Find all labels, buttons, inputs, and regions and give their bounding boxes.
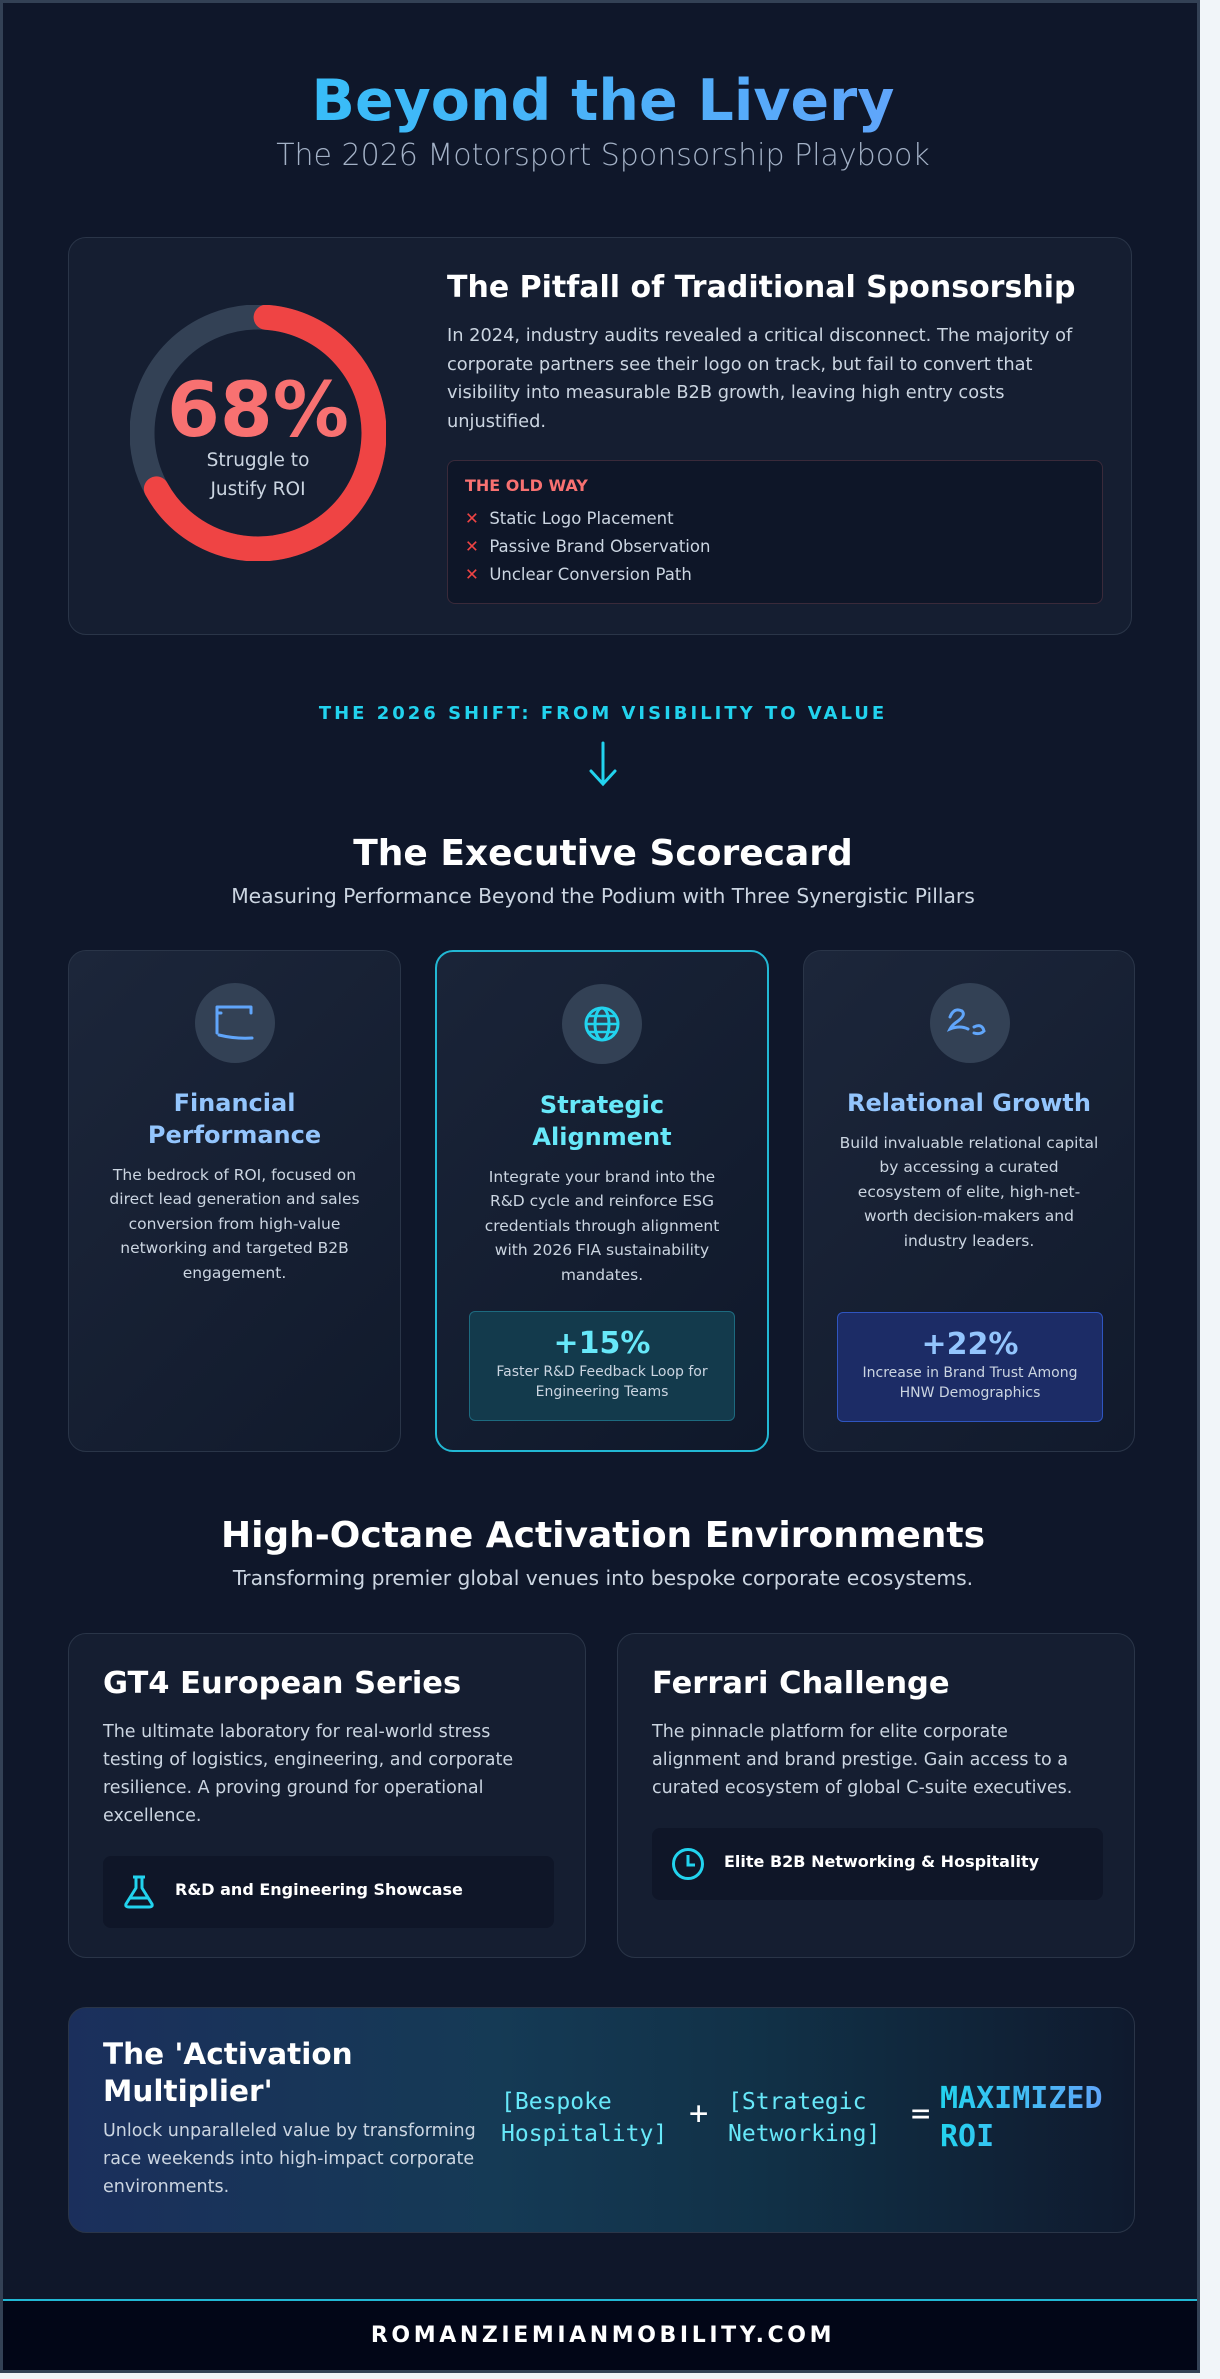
card title	[148, 1089, 321, 1149]
old way box: ✕ Passive Brand Observation	[465, 537, 710, 556]
stat: +15%: Faster R&D Feedback Loop for	[496, 1364, 708, 1380]
shift label: THE 2026 SHIFT: FROM VISIBILITY TO VALUE	[319, 703, 887, 724]
formula	[501, 2081, 1103, 2154]
old way box: THE OLD WAY	[465, 476, 588, 495]
heading: activation environments: High-Octane Activation Environments	[221, 1515, 985, 1556]
heading: The Pitfall of Traditional Sponsorship	[447, 270, 1075, 305]
formula: =	[911, 2094, 930, 2132]
formula: [Bespoke	[501, 2089, 612, 2115]
card body: The bedrock of ROI, focused on direct lead generation and sales conversion from high-value networking and targeted B2B engagement.	[109, 1166, 360, 1282]
footer: ROMANZIEMIANMOBILITY.COM	[371, 2323, 835, 2348]
formula: Hospitality]	[501, 2121, 667, 2147]
paragraph: In 2024, industry audits revealed a critical disconnect. The majority of corporate partners see their logo on track, but fail to convert that visibility into measurable B2B growth, leaving high entry costs unjustified.	[447, 325, 1072, 432]
subheading: Transforming premier global venues into bespoke corporate ecosystems.	[233, 1566, 973, 1590]
card title	[532, 1091, 672, 1151]
formula: Networking]	[728, 2121, 880, 2147]
formula: [Strategic	[728, 2089, 866, 2115]
feature: R&D	[103, 1856, 554, 1928]
donut chart: 68%	[130, 305, 386, 561]
card: strategic alignment	[435, 950, 769, 1452]
icon: chart	[195, 983, 275, 1063]
feature: networking	[652, 1828, 1103, 1900]
venue title: GT4 European Series	[103, 1666, 461, 1701]
icon: globe	[562, 984, 642, 1064]
venue body: The pinnacle platform for elite corporate alignment and brand prestige. Gain access to a curated ecosystem of global C-suite executives.	[652, 1722, 1072, 1798]
panel: activation multiplier	[68, 2007, 1135, 2233]
icon: handshake	[930, 983, 1010, 1063]
multiplier body: Unlock unparalleled value by transforming race weekends into high-impact corporate environments.	[103, 2121, 476, 2197]
card title: Strategic	[540, 1091, 664, 1119]
stat: +22%: +22%	[922, 1327, 1018, 1362]
venue body: The ultimate laboratory for real-world stress testing of logistics, engineering, and corporate resilience. A proving ground for operational excellence.	[103, 1722, 513, 1826]
old way box: ✕ Static Logo Placement	[465, 509, 674, 528]
multiplier title: Multiplier'	[103, 2074, 273, 2108]
footer	[3, 2299, 1203, 2379]
card title: Relational Growth	[847, 1089, 1091, 1117]
title: Beyond the Livery	[312, 68, 894, 134]
card title: Financial	[174, 1089, 295, 1117]
stat: +22%: Increase in Brand Trust Among	[863, 1365, 1077, 1381]
multiplier title: The 'Activation	[103, 2037, 353, 2071]
donut chart: 68%: 68%	[167, 365, 349, 454]
stat: +22%: HNW Demographics	[900, 1385, 1040, 1401]
icon: clock	[672, 1848, 704, 1880]
old way box	[447, 460, 1103, 604]
multiplier title	[103, 2037, 353, 2108]
panel: Ferrari Challenge	[617, 1633, 1135, 1958]
stat: +15%: +15%	[554, 1326, 650, 1361]
card body: Build invaluable relational capital by accessing a curated ecosystem of elite, high-net-worth decision-makers and industry leaders.	[840, 1134, 1098, 1250]
formula: +	[689, 2094, 708, 2132]
venue title: Ferrari Challenge	[652, 1666, 950, 1701]
card title: Alignment	[532, 1123, 672, 1151]
donut chart: 68%: Struggle to	[207, 450, 309, 471]
donut chart: 68%: Justify ROI	[210, 479, 306, 500]
feature: networking: Elite B2B Networking & Hospitality	[724, 1852, 1039, 1871]
stat: +22%	[837, 1312, 1103, 1422]
stat: +15%: Engineering Teams	[536, 1384, 668, 1400]
card: financial performance	[68, 950, 401, 1452]
subtitle: The 2026 Motorsport Sponsorship Playbook	[276, 138, 930, 173]
card title: Performance	[148, 1121, 321, 1149]
feature: R&D: R&D and Engineering Showcase	[175, 1880, 463, 1899]
arrow	[589, 742, 617, 786]
panel: pitfall	[68, 237, 1132, 635]
panel: GT4 European Series	[68, 1633, 586, 1958]
subheading: Measuring Performance Beyond the Podium with Three Synergistic Pillars	[231, 884, 975, 908]
old way box: ✕ Unclear Conversion Path	[465, 565, 692, 584]
stat: +15%	[469, 1311, 735, 1421]
formula: ROI	[940, 2119, 994, 2154]
formula: MAXIMIZED	[940, 2081, 1103, 2116]
card: relational growth	[803, 950, 1135, 1452]
icon: flask	[124, 1876, 154, 1908]
card body: Integrate your brand into the R&D cycle and reinforce ESG credentials through alignment with 2026 FIA sustainability mandates.	[485, 1168, 719, 1284]
heading: executive scorecard: The Executive Scorecard	[353, 833, 853, 874]
